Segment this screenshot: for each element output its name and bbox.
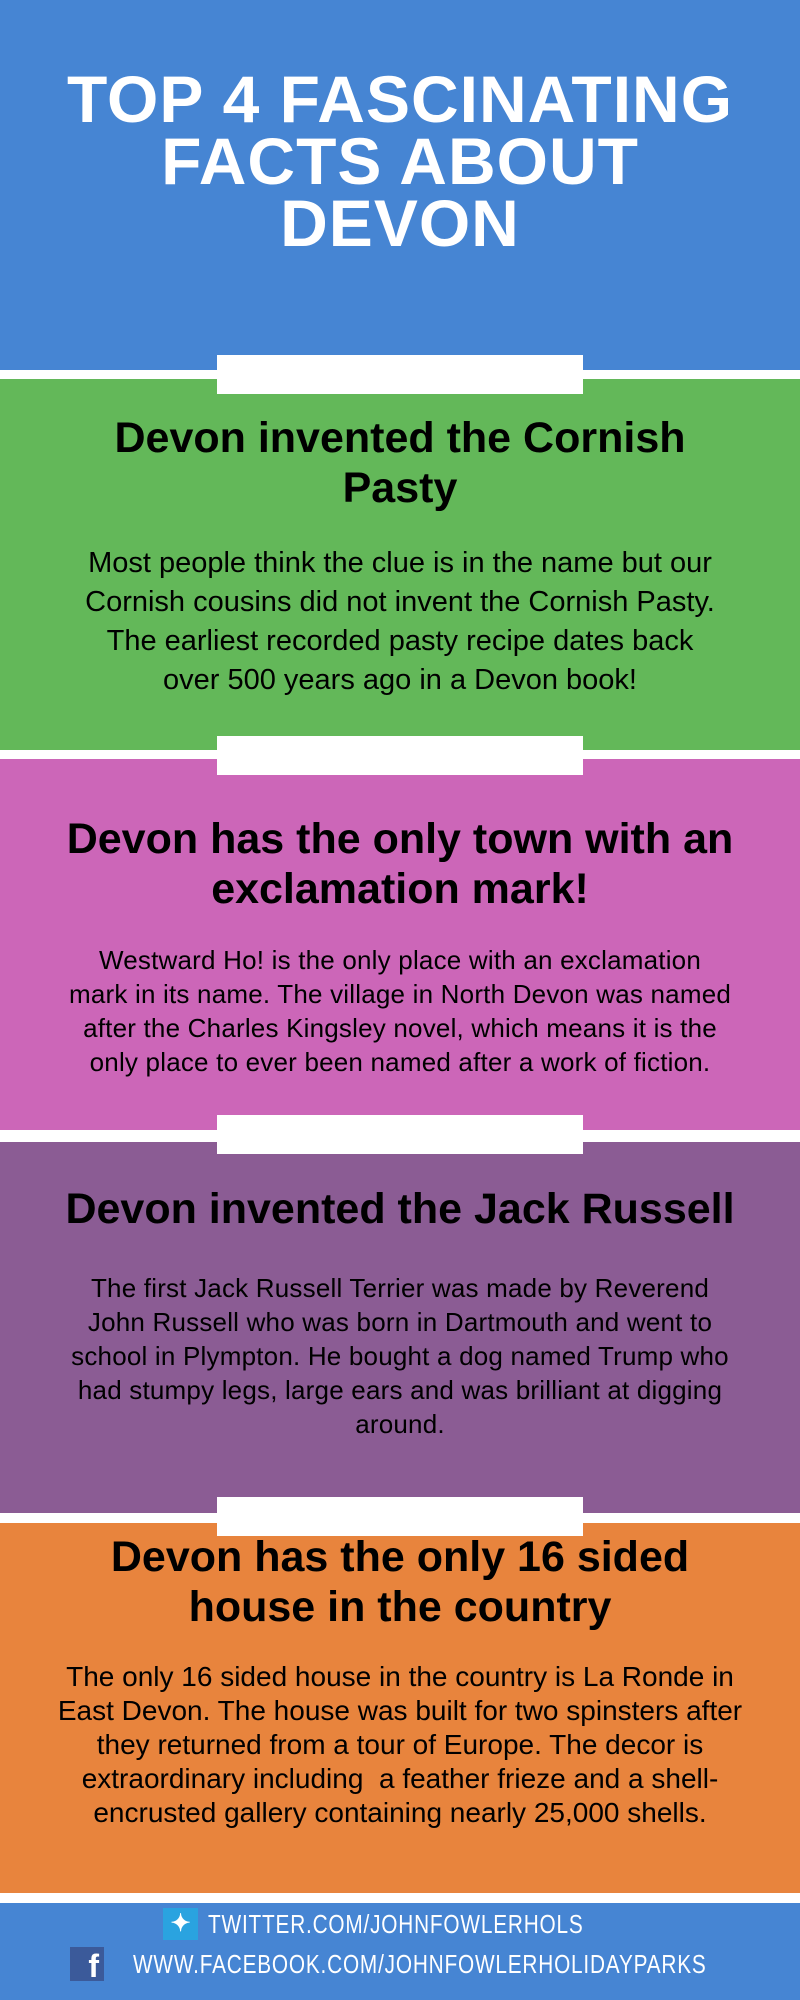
heading: exclamation: exclamation mark! [211,865,589,913]
text: jack russell [71,1273,729,1439]
text: pasty: Most people think the clue is in the name but our [88,547,712,579]
text: exclamation: only place to ever been named after a work of fiction. [90,1047,710,1077]
text: pasty: The earliest recorded pasty recipe dates back [107,625,693,657]
panel: exclamation mark [0,759,800,1130]
footer [0,1903,800,2000]
heading: pasty: Pasty [343,464,457,512]
panel: 16 sided house [0,1523,800,1893]
heading: exclamation: Devon has the only town with an [67,815,733,863]
panel: cornish pasty [0,379,800,750]
text: pasty: Cornish cousins did not invent the Cornish Pasty. [85,586,715,618]
icon: twitter [163,1908,198,1940]
text: exclamation: after the Charles Kingsley novel, which means it is the [83,1013,717,1043]
text: exclamation: mark in its name. The village in North Devon was named [69,979,731,1009]
text: pasty [85,547,715,696]
title: DEVON [280,186,520,260]
icon: facebook [70,1947,104,1981]
text: jack russell: school in Plympton. He bought a dog named Trump who [71,1341,729,1371]
twitter link: TWITTER.COM/JOHNFOWLERHOLS [208,1909,584,1939]
text: jack russell: had stumpy legs, large ears and was brilliant at digging [78,1375,722,1405]
icon: facebook: f [88,1948,99,1984]
text: jack russell: John Russell who was born in Dartmouth and went to [88,1307,712,1337]
heading: jack russell: Devon invented the Jack Russell [65,1185,735,1233]
text: exclamation: Westward Ho! is the only place with an exclamation [99,945,701,975]
heading: pasty [114,414,686,512]
title: FACTS ABOUT [161,124,639,198]
heading: house: house in the country [189,1583,611,1631]
text: house: they returned from a tour of Europe. The decor is [97,1729,703,1760]
text: house: The only 16 sided house in the country is La Ronde in [66,1661,734,1692]
text: exclamation [69,945,731,1077]
heading: exclamation [67,815,733,913]
title [67,62,733,260]
icon: twitter: ✦ [170,1910,191,1937]
title: TOP 4 FASCINATING [67,62,733,136]
heading: pasty: Devon invented the Cornish [114,414,686,462]
facebook link: WWW.FACEBOOK.COM/JOHNFOWLERHOLIDAYPARKS [133,1949,707,1979]
text: house [58,1661,742,1828]
heading: house [111,1533,689,1631]
heading: house: Devon has the only 16 sided [111,1533,689,1581]
text: pasty: over 500 years ago in a Devon book! [163,664,637,696]
header band [0,0,800,370]
panel: jack russell [0,1142,800,1513]
text: house: encrusted gallery containing nearly 25,000 shells. [93,1797,707,1828]
text: jack russell: around. [355,1409,445,1439]
text: house: East Devon. The house was built for two spinsters after [58,1695,742,1726]
text: house: extraordinary including a feather frieze and a shell- [82,1763,718,1794]
text: jack russell: The first Jack Russell Terrier was made by Reverend [91,1273,709,1303]
